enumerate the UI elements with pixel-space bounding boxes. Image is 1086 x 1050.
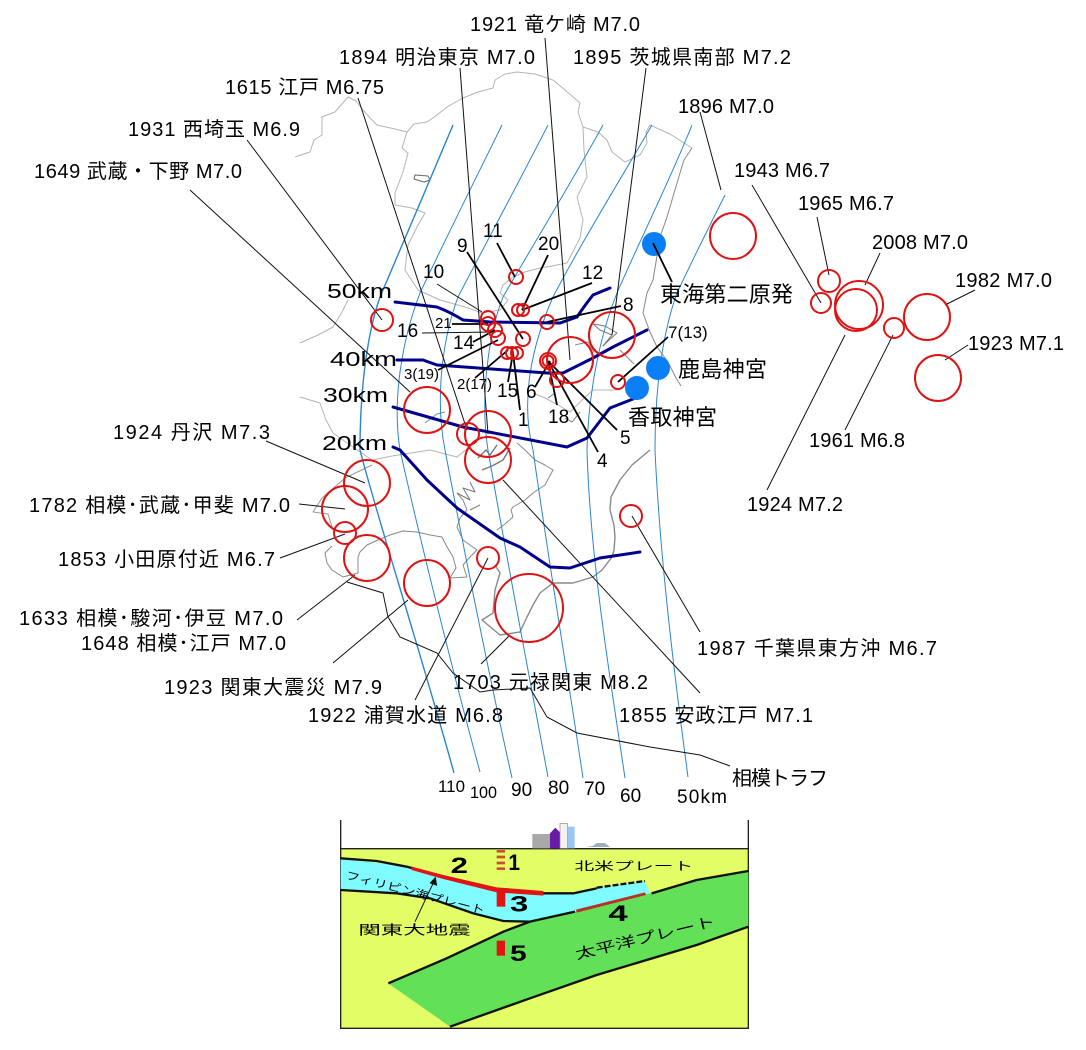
- earthquake labels: 1703 元禄関東 M8.2: [453, 671, 648, 694]
- earthquake labels: 1615 江戸 M6.75: [225, 76, 384, 99]
- car: [587, 843, 610, 847]
- diagram numbers: 2: [451, 853, 468, 878]
- leader lines for epicentre labels: [190, 38, 975, 700]
- buildings: [532, 823, 575, 848]
- earthquake labels: 1923 M7.1: [968, 333, 1064, 355]
- diagram plate labels: 太平洋プレート: [574, 913, 717, 962]
- red epicentre circles: [322, 213, 961, 642]
- depth labels for blue contours (km): 30km: [323, 385, 388, 407]
- earthquake labels: 1987 千葉県東方沖 M6.7: [697, 637, 937, 660]
- earthquake labels: 相模トラフ: [732, 767, 828, 790]
- depth labels at bottom of contours: 50km: [677, 787, 727, 808]
- zone 2: [412, 867, 543, 896]
- Sagami Trough line: [347, 582, 730, 766]
- depth labels at bottom of contours: 100: [470, 783, 497, 802]
- event number labels: 12: [582, 263, 603, 284]
- event number labels: 9: [457, 236, 468, 257]
- event number labels: 21: [435, 315, 452, 332]
- zone 3: [497, 890, 505, 907]
- diagram background: [341, 848, 748, 1028]
- earthquake labels: 1921 竜ケ崎 M7.0: [470, 13, 640, 36]
- earthquake labels: 1855 安政江戸 M7.1: [619, 704, 813, 727]
- event number labels: 1: [518, 410, 529, 431]
- depth labels at bottom of contours: 110: [438, 777, 465, 796]
- event number labels: 2(17): [457, 376, 492, 393]
- earthquake labels: 1961 M6.8: [809, 430, 905, 452]
- earthquake labels: 1922 浦賀水道 M6.8: [308, 704, 503, 727]
- event number labels: 6: [526, 382, 537, 403]
- earthquake labels: 1648 相模･江戸 M7.0: [81, 632, 286, 655]
- event number labels: [397, 221, 708, 472]
- earthquake labels: 1853 小田原付近 M6.7: [58, 548, 275, 571]
- earthquake labels: 1965 M6.7: [798, 193, 894, 215]
- depth labels for blue contours (km): 40km: [330, 349, 397, 371]
- earthquake labels: 1982 M7.0: [955, 270, 1052, 292]
- earthquake labels: 1924 丹沢 M7.3: [113, 421, 270, 444]
- depth labels at bottom of contours: 80: [548, 778, 569, 799]
- depth labels at bottom of contours: 70: [584, 779, 605, 800]
- event number labels: 20: [538, 234, 559, 255]
- zone 5: [497, 941, 505, 956]
- zone 1 dashed: [497, 850, 505, 870]
- leader lines for numbered events: [438, 243, 668, 452]
- event number labels: 10: [423, 262, 444, 283]
- diagram plate labels: 北米プレート: [574, 860, 693, 873]
- earthquake labels: 1649 武蔵・下野 M7.0: [34, 160, 242, 183]
- plate boundaries: [341, 858, 748, 1027]
- earthquake labels: 2008 M7.0: [872, 232, 968, 254]
- event number labels: 18: [548, 407, 569, 428]
- earthquake labels: 1923 関東大震災 M7.9: [164, 676, 382, 699]
- event number labels: 16: [397, 321, 418, 342]
- map outline: Kanto coast and prefecture borders: [295, 72, 692, 635]
- earthquake labels: 1931 西埼玉 M6.9: [128, 118, 300, 141]
- diagram numbers: [451, 850, 629, 966]
- depth labels for blue contours (km): 20km: [322, 433, 387, 455]
- leader from Tokai plant dot: [653, 243, 672, 282]
- earthquake labels: 1924 M7.2: [747, 494, 843, 516]
- frame and ground line: [341, 820, 748, 1028]
- Pacific plate: [388, 871, 748, 1027]
- red rupture zones: [412, 850, 646, 956]
- event number labels: 11: [483, 221, 503, 242]
- earthquake labels: 1895 茨城県南部 M7.2: [573, 46, 791, 69]
- depth labels at bottom of contours: [438, 777, 727, 808]
- depth contours of the Pacific plate, 50–110 km: [360, 125, 725, 778]
- earthquake labels: 東海第二原発: [660, 282, 793, 307]
- event number labels: 5: [620, 428, 631, 449]
- event number labels: 3(19): [404, 366, 439, 383]
- event number labels: 4: [597, 451, 608, 472]
- earthquake labels: 1782 相模･武蔵･甲斐 M7.0: [29, 494, 290, 517]
- earthquake labels: 香取神宮: [628, 405, 717, 430]
- earthquake labels: 鹿島神宮: [678, 357, 767, 382]
- event number labels: 14: [453, 333, 475, 354]
- event number labels: 15: [497, 381, 518, 402]
- earthquake labels: 1896 M7.0: [678, 96, 774, 118]
- earthquake labels: 1633 相模･駿河･伊豆 M7.0: [19, 607, 283, 630]
- zone 4: [576, 892, 646, 913]
- diagram plate labels: フィリピン海プレート: [344, 869, 486, 917]
- diagram numbers: 5: [510, 941, 527, 966]
- blue dots: nuclear plant and shrines: [625, 232, 670, 400]
- earthquake labels: 1894 明治東京 M7.0: [339, 46, 535, 69]
- event number labels: 7(13): [668, 323, 708, 342]
- earthquake labels: 1943 M6.7: [734, 160, 830, 182]
- diagram numbers: 1: [508, 850, 520, 875]
- event number labels: 8: [623, 295, 634, 316]
- diagram plate labels: 関東大地震: [358, 923, 471, 937]
- earthquake labels: [19, 13, 1064, 790]
- diagram numbers: 3: [510, 892, 528, 917]
- diagram numbers: 4: [608, 901, 629, 926]
- depth labels for blue contours (km): [322, 281, 397, 455]
- diagram plate labels: [344, 860, 717, 962]
- arrow to Kanto great earthquake zone: [415, 878, 437, 922]
- depth labels for blue contours (km): 50km: [327, 281, 392, 303]
- Philippine Sea plate: [341, 858, 650, 922]
- depth labels at bottom of contours: 60: [620, 786, 641, 807]
- depth labels at bottom of contours: 90: [511, 780, 532, 801]
- depth contours of the Philippine Sea plate, 20–50 km: [393, 288, 647, 568]
- plate cross-section diagram: [341, 820, 748, 1028]
